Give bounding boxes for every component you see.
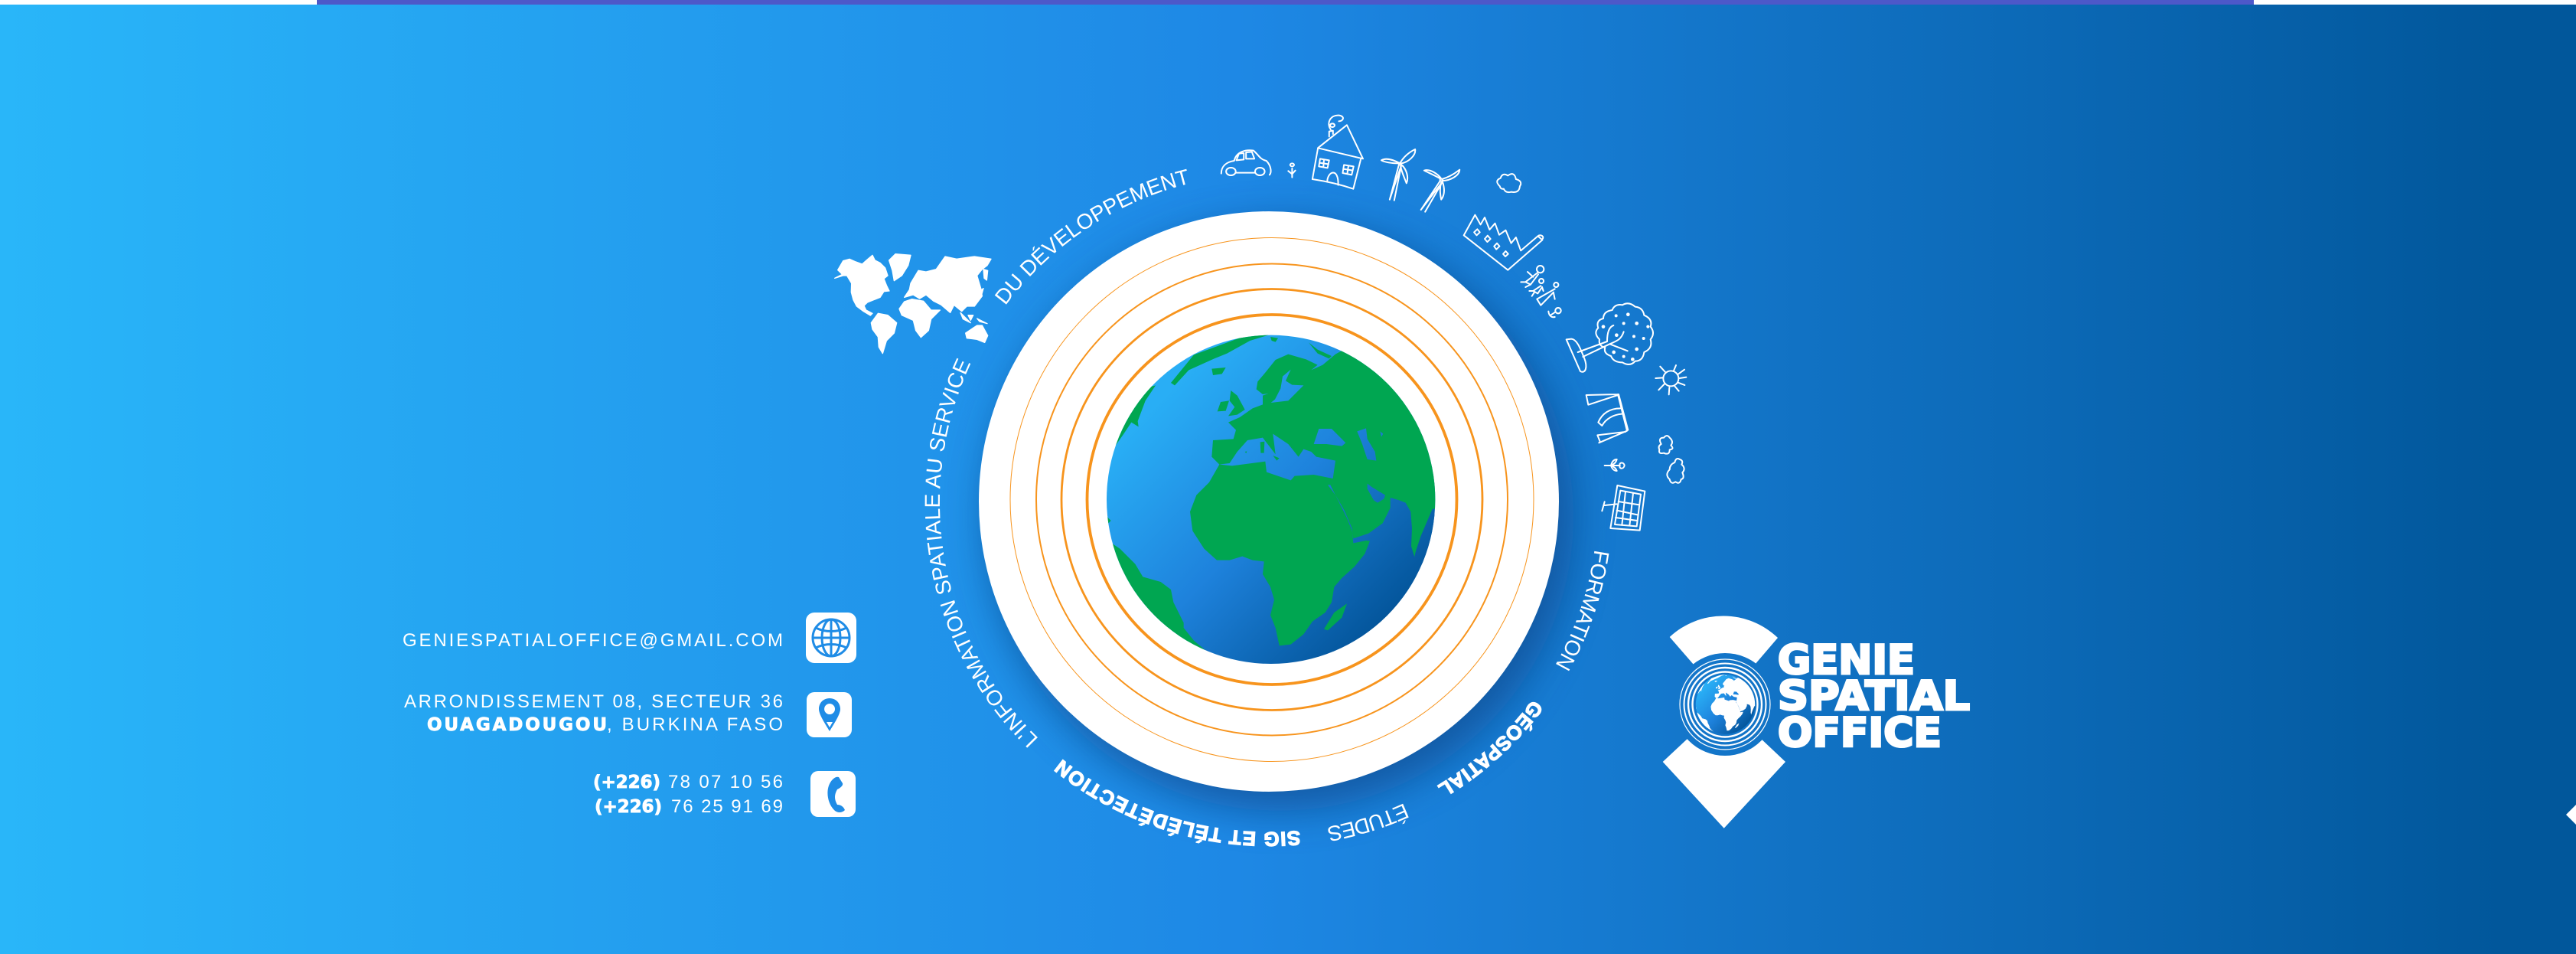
icon: swing (1586, 394, 1628, 443)
doodle icons along the arc (1221, 116, 1543, 270)
icon: map pin (807, 692, 852, 737)
contact block: 78 07 10 56 (668, 772, 783, 792)
logo: Genie Spatial Office: OFFICE (1778, 710, 1942, 756)
icon: family (1521, 266, 1561, 317)
logo: Genie Spatial Office: SPATIAL (1778, 673, 1970, 720)
icon: factory (1464, 215, 1543, 270)
orange concentric rings (1010, 237, 1534, 761)
circular text: DU DÉVELOPPEMENT: DU DÉVELOPPEMENT (995, 168, 1187, 305)
icon: sprout (1605, 459, 1625, 471)
circular text: L'INFORMATION SPATIALE AU SERVICE: L'INFORMATION SPATIALE AU SERVICE (924, 358, 1038, 748)
circular text: SIG ET TÉLÉDÉTECTION: SIG ET TÉLÉDÉTECTION (1054, 760, 1300, 847)
central disc with rings and globe (979, 211, 1573, 811)
icon: clouds (1659, 436, 1684, 483)
contact block: , BURKINA FASO (607, 714, 783, 735)
contact block: OUAGADOUGOU (427, 715, 607, 735)
contact block: 76 25 91 69 (671, 796, 783, 817)
icon: wind turbine (1421, 170, 1459, 212)
top strip (0, 0, 2576, 5)
icon: world map (835, 254, 991, 354)
icon: flower (1288, 163, 1296, 178)
logo rings (1680, 659, 1770, 750)
phone numbers: (+226) (593, 773, 660, 792)
icon: telephone (810, 771, 856, 817)
circular text: GÉOSPATIAL: GÉOSPATIAL (1437, 701, 1541, 795)
logo globe (1696, 675, 1756, 734)
logo wordmark: GENIE (1778, 637, 1915, 684)
icon: tree (1567, 303, 1653, 372)
icon: car (1221, 150, 1271, 175)
email text: GENIESPATIALOFFICE@GMAIL.COM (403, 630, 783, 651)
circular text: ÉTUDES: ÉTUDES (1328, 804, 1409, 841)
white diamond at right edge (2566, 805, 2576, 825)
icon: wind turbine (1381, 149, 1415, 201)
icon: solar panel (1602, 485, 1645, 531)
logo: Genie Spatial Office (1663, 616, 1970, 828)
icon: cloud (1497, 174, 1521, 192)
address text: ARRONDISSEMENT 08, SECTEUR 36 (404, 691, 783, 712)
earth globe (1107, 335, 1436, 664)
seas (1219, 370, 1439, 567)
icon: house (1312, 116, 1363, 189)
contact block: (+226) (595, 797, 662, 817)
white disc (979, 211, 1559, 792)
contact block (403, 613, 856, 817)
icon: web globe (806, 613, 856, 663)
logo mark: fan and diamond (1670, 616, 1778, 665)
circular text: FORMATION: FORMATION (1556, 551, 1609, 671)
icon: sun (1655, 365, 1686, 394)
